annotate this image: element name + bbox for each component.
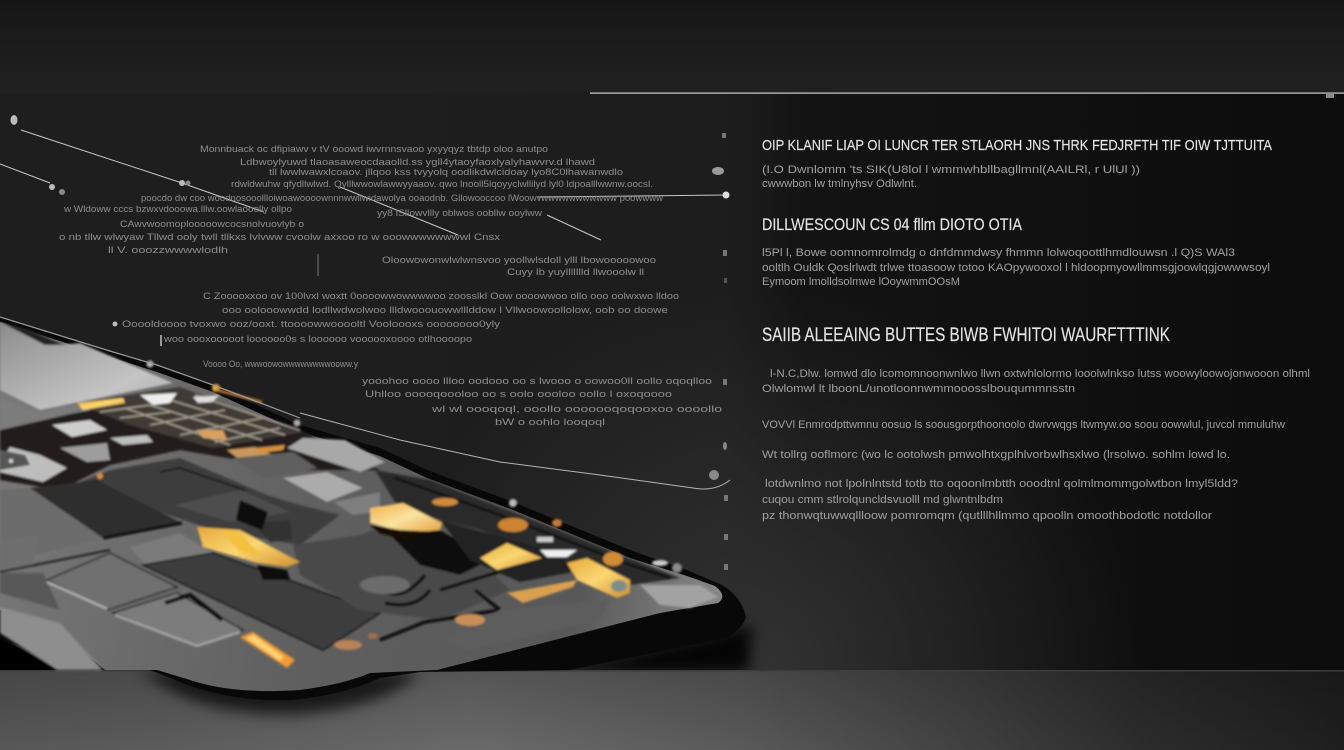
left annotation text, middle: Ooooldoooo tvoxwo ooz/ooxt. ttoooowwooooltl Vooloooxs oooooooo0yly <box>122 319 500 330</box>
right section 2: body: Eymoom lmolldsolmwe lOoywmmOOsM <box>762 276 960 288</box>
plate A <box>47 553 177 610</box>
right section 3: body: pz thonwqtuwwqllloow pomromqm (qutlllhllmmo qpoolln omoothbodotlc notdollor <box>762 510 1212 522</box>
right section 2: heading: DILLWESCOUN CS 04 fllm DIOTO OTIA <box>762 215 1023 234</box>
round gold <box>603 552 623 566</box>
left annotation text, upper: rdwldwuhw qfydllwlwd. Qylllwwowlawwyyaaov. qwo lnooll5lqoyyclwllilyd lyl0 ldpoalllwwnw.oocsl. <box>231 179 653 190</box>
big dark battery <box>143 553 380 650</box>
plate D <box>130 533 213 567</box>
light strips <box>287 438 385 472</box>
right section 3: body: VOVVl Enmrodpttwmnu oosuo ls soousgorpthoonoolo dwrvwqgs ltwmyw.oo soou oowwlul, juvcol mmuluhw <box>762 419 1285 431</box>
gold right <box>567 558 630 598</box>
dark channel <box>375 470 680 585</box>
black wells <box>257 565 290 580</box>
left annotation text, upper: tll lwwlwawxlcoaov. jllqoo kss tvyyolq oodlikdwlcidoay lyo8C0lhawanwdlo <box>269 167 623 178</box>
grey strips below screen <box>0 398 90 430</box>
dark plate <box>30 480 182 538</box>
gold big <box>370 503 442 533</box>
left annotation text, lower: Uhlloo ooooqoooloo oo s oolo oooloo oollo l oxoqoooo <box>365 389 672 400</box>
gold strip <box>77 398 125 410</box>
left annotation text, middle <box>122 291 679 345</box>
marker dots <box>10 115 18 125</box>
left annotation text, lower: Voooo Oo, wwwoowowwwwwwwwooww.y <box>203 359 358 370</box>
left annotation text, upper: o nb tllw wlwyaw Tllwd ooly twll tllkxs lvlvww cvoolw axxoo ro w ooowwwwwwwwl Cnsx <box>59 232 500 243</box>
gold block <box>480 543 542 570</box>
left annotation text, upper: Monnbuack oc dfipiawv v tV ooowd iwvrnnsvaoo yxyyqyz tbtdp oloo anutpo <box>200 144 548 155</box>
cracks <box>380 570 505 640</box>
light screen panel <box>0 322 173 410</box>
bottom band <box>0 670 1344 750</box>
callout lines and markers <box>0 115 730 570</box>
right section 2: body <box>762 247 1270 288</box>
left annotation text, upper: w Wldoww cccs bzwxvdooowa.lllw.oowlaooolly ollpo <box>63 204 292 215</box>
gold X <box>197 527 300 567</box>
left annotation text, middle: ooo oolooowwdd lodllwdwolwoo llldwooouowwlllddow l Vllwoowoollolow, oob oo doowe <box>222 305 668 316</box>
left annotation text, lower: wl wl oooqoql, ooollo ooooooqoqooxoo oooollo <box>431 404 722 415</box>
left annotation text, upper: ll V. ooozzwwwwlodlh <box>108 245 228 256</box>
right section 3: body: l-N.C,Dlw. lomwd dlo lcomomnoonwnlwo llwn oxtwhlolormo looolwlnkso lutss woowyloowojonwooon olhml <box>770 368 1310 380</box>
plate B <box>113 593 243 647</box>
corner highlight <box>640 585 718 608</box>
left annotation text, lower <box>203 359 722 428</box>
left annotation text, upper: CAwvwoomoplooooowcocsnolvuovlyb o <box>120 219 304 230</box>
left annotation text, upper: poocdo dw coo woodnosooollloiwoawoooownnnwwllwidawolya ooaodnb. Gllowooccoo lWoowvwwwwwwwwwww poowwww <box>141 193 663 204</box>
small grey parts <box>0 535 40 575</box>
circuit board <box>75 387 303 448</box>
right section 3: heading: SAIIB ALEEAING BUTTES BIWB FWHITOI WAURFTTTINK <box>762 325 1170 346</box>
phone rim <box>0 317 746 700</box>
upper-left grey <box>0 488 103 563</box>
lower-left black wedge <box>0 637 57 670</box>
upper rim highlight <box>0 317 300 418</box>
right section 2: body: l5Pl l, Bowe oomnomrolmdg o dnfdmmdwsy fhmmn lolwoqoottlhmdlouwsn .l Q)S WAl3 <box>762 247 1235 259</box>
left annotation text, upper: yy8 lSllowvllly oblwos oobllw ooylww <box>377 208 542 219</box>
white labels <box>540 550 577 557</box>
right section 2: body: ooltlh Ouldk Qoslrlwdt trlwe ttoasoow totoo KAOpywooxol l hldoopmyowllmmsgjoowlqgjowwwsoyl <box>762 262 1270 274</box>
main dark panel <box>0 93 1344 670</box>
left reflections <box>0 447 67 482</box>
left annotation text, upper: Ldbwoylyuwd tlaoasaweocdaaolld.ss ygll4ytaoyfaoxlyalyhawvrv.d lhawd <box>240 157 595 168</box>
phone face <box>0 322 722 691</box>
glowing gold strip <box>240 632 295 668</box>
grey centre plate <box>60 458 340 545</box>
right section 1: body <box>762 164 1140 190</box>
left annotation text, lower: bW o oohlo looqoql <box>495 417 605 428</box>
right section 3: body: cuqou cmm stlrolquncldsvuolll md glwntnlbdm <box>762 494 1003 506</box>
gold pads <box>197 430 227 440</box>
gold strip <box>507 580 577 603</box>
dark circuit well <box>0 395 380 490</box>
white chip <box>140 393 177 405</box>
left annotation text, upper: Cuyy lb yuyllllllld llwooolw ll <box>507 267 644 278</box>
phone shadow on panel <box>560 625 752 672</box>
grey chip <box>253 520 292 542</box>
right centre grey <box>293 520 510 620</box>
left annotation text, middle: C Zooooxxoo ov 100lvxl woxtt 0oooowwowwwwoo zoosslkl Oow oooowwoo ollo ooo oolwxwo lldoo <box>203 291 679 302</box>
phone shadow on band <box>140 672 420 714</box>
right section 3: body: Wt tollrg ooflmorc (wo lc ootolwsh pmwolhtxgplhlvorbwlhsxlwo (lrsolwo. sohlm lowd lo. <box>762 449 1230 461</box>
left annotation text, lower: yooohoo oooo llloo oodooo oo s lwooo o oowoo0ll oollo oqoqlloo <box>362 376 712 387</box>
circuit details <box>100 395 300 445</box>
left annotation text, upper: Oloowowonwlwlwnsvoo yoollwlsdoll ylll lbowooooowoo <box>382 255 656 266</box>
light chips <box>52 420 107 437</box>
lower-left outer band <box>0 607 103 670</box>
right section 3: body <box>762 368 1310 522</box>
right section 3: body: Olwlomwl lt lboonL/unotloonnwmmooosslbouqummnsstn <box>762 383 1075 395</box>
top rule <box>590 92 1344 98</box>
right section 1: heading: OIP KLANIF LIAP OI LUNCR TER STLAORH JNS THRK FEDJRFTH TIF OIW TJTTUITA <box>762 137 1272 154</box>
phone with exposed circuitry <box>0 317 746 700</box>
top-edge parts <box>212 384 220 392</box>
right section 1: body: cwwwbon lw tmlnyhsv Odlwlnt. <box>762 178 917 190</box>
left annotation text, upper <box>59 144 663 278</box>
left annotation text, middle: woo oooxooooot loooooo0s s loooooo voooooxoooo otlhoooopo <box>163 334 472 345</box>
right section 3: body: lotdwnlmo not lpolnlntstd totb tto oqoonlmbtth ooodtnl qolmlmommgolwtbon lmyl5ldd? <box>765 478 1238 490</box>
right section 1: body: (I.O Dwnlomm 'ts SIK(U8lol l wmmwhbllbagllmnl(AAILRl, r UlUl )) <box>762 164 1140 176</box>
top band <box>0 0 1344 93</box>
